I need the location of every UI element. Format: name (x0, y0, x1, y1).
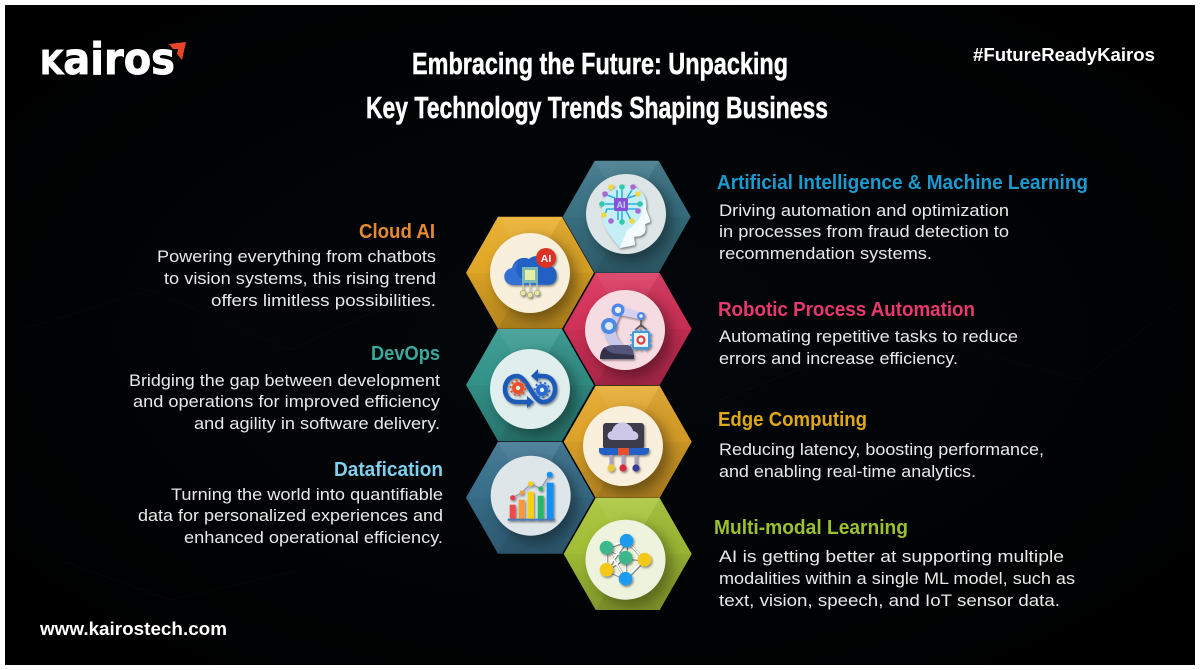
hashtag: #FutureReadyKairos (973, 45, 1155, 65)
text block: DevOps: and operations for improved efficiency (133, 392, 441, 411)
website URL: www.kairostech.com (39, 619, 227, 639)
icon: bar chart (508, 472, 555, 521)
text block: Datafication: enhanced operational efficiency. (184, 528, 443, 547)
text block: Artificial Intelligence & Machine Learning (717, 172, 1088, 263)
text block: Robotic Process Automation: Automating repetitive tasks to reduce (719, 327, 1018, 346)
icon: edge device (599, 422, 649, 472)
text block: DevOps (129, 343, 441, 433)
text block: Multi-modal Learning: text, vision, speech, and IoT sensor data. (719, 591, 1060, 610)
hexagon: Multi-modal Learning (564, 498, 692, 610)
text block: Edge Computing (718, 409, 1044, 481)
text block: Edge Computing: Reducing latency, boosting performance, (719, 440, 1044, 459)
icon: logo arrow (169, 42, 186, 60)
text block: Artificial Intelligence & Machine Learning: Artificial Intelligence & Machine Learning (717, 172, 1088, 194)
text block: DevOps: Bridging the gap between development (129, 371, 440, 390)
text block: Robotic Process Automation: Robotic Process Automation (718, 299, 975, 321)
hexagon: Edge Computing (564, 386, 692, 498)
icon: AI head: AI (616, 200, 626, 210)
icon: devops loop (505, 369, 555, 408)
text block: Datafication: Datafication (334, 459, 443, 481)
logo: Kairos: Kairos (40, 34, 175, 85)
icon: robot arm (600, 304, 652, 359)
text block: Cloud AI (157, 221, 436, 310)
text block: Datafication: Turning the world into quantifiable (171, 485, 443, 504)
text block: Multi-modal Learning (714, 517, 1075, 610)
hexagon: Datafication (466, 442, 594, 554)
title: Embracing the Future: Unpacking (412, 46, 788, 81)
icon: cloud chip: AI (541, 253, 551, 265)
text block: Robotic Process Automation: errors and increase efficiency. (719, 349, 958, 368)
text block: Multi-modal Learning: Multi-modal Learning (714, 517, 908, 539)
text block: Datafication: data for personalized experiences and (138, 506, 443, 525)
text block: Robotic Process Automation (718, 299, 1018, 368)
hexagon: DevOps (466, 329, 594, 441)
icon: neural network (600, 534, 651, 586)
text block: Artificial Intelligence & Machine Learning: Driving automation and optimization (719, 201, 1009, 220)
text block: Artificial Intelligence & Machine Learning: recommendation systems. (719, 244, 932, 263)
hexagon: Artificial Intelligence (563, 161, 691, 273)
text block: Datafication (138, 459, 443, 547)
hexagon: Cloud AI (466, 217, 594, 329)
text block: Cloud AI: Powering everything from chatbots (157, 247, 436, 266)
text block: DevOps: and agility in software delivery. (194, 414, 440, 433)
title (366, 46, 828, 125)
text block: Edge Computing: Edge Computing (718, 409, 867, 431)
text block: Cloud AI: offers limitless possibilities. (211, 291, 436, 310)
text block: Multi-modal Learning: AI is getting better at supporting multiple (719, 547, 1064, 566)
text block: DevOps: DevOps (371, 343, 440, 365)
text block: Artificial Intelligence & Machine Learning: in processes from fraud detection to (719, 222, 1009, 241)
text block: Cloud AI: to vision systems, this rising trend (164, 269, 436, 288)
text block: Multi-modal Learning: modalities within a single ML model, such as (719, 569, 1075, 588)
text block: Cloud AI: Cloud AI (359, 221, 435, 243)
title: Key Technology Trends Shaping Business (366, 90, 828, 125)
text block: Edge Computing: and enabling real-time analytics. (719, 462, 976, 481)
hexagon: Robotic Process Automation (564, 273, 692, 385)
